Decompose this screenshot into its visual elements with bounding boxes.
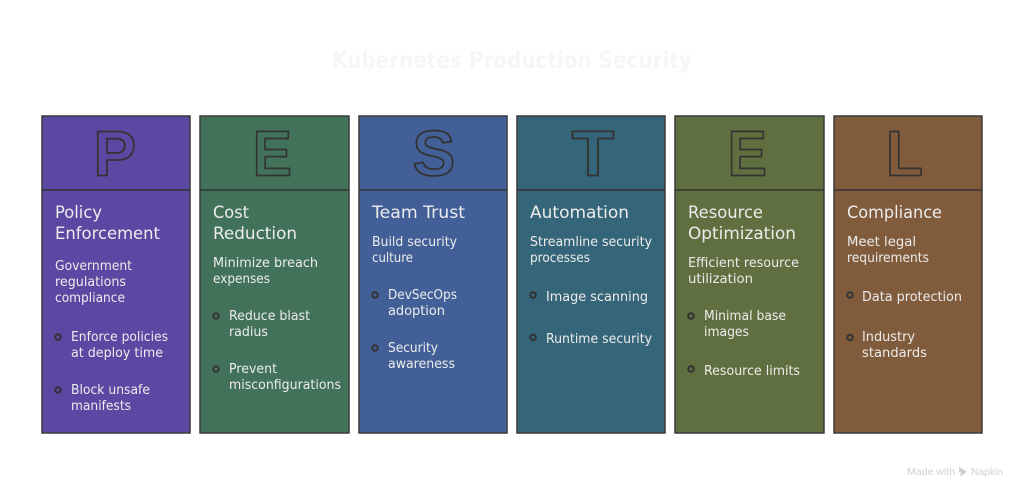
heading: Resource Optimization: Optimization xyxy=(688,224,796,244)
description: requirements xyxy=(847,251,929,266)
description: Efficient resource xyxy=(688,256,799,271)
bullet: Security awareness: awareness xyxy=(388,357,455,372)
panel: P Policy Enforcement xyxy=(42,116,190,433)
bullet: Minimal base images: Minimal base xyxy=(704,309,786,324)
letter L: L xyxy=(886,118,923,190)
heading: Policy Enforcement: Policy xyxy=(55,203,102,223)
watermark: Made with Napkin xyxy=(907,466,1003,478)
bullet: Prevent misconfigurations: Prevent xyxy=(229,362,277,377)
letter S: S xyxy=(412,118,455,190)
letter E: E xyxy=(728,118,767,190)
bullet: Data protection: Data protection xyxy=(862,290,962,305)
bullet: Security awareness: Security xyxy=(388,341,438,356)
description: processes xyxy=(530,251,590,266)
bullet: Reduce blast radius: Reduce blast xyxy=(229,309,310,324)
panel: L Compliance xyxy=(834,116,982,433)
description xyxy=(530,235,652,266)
watermark: Made with Napkin: Made with xyxy=(907,466,955,478)
panel: S Team Trust xyxy=(359,116,507,433)
panel: E Resource Optimization xyxy=(675,116,824,433)
heading: Policy Enforcement: Enforcement xyxy=(55,224,160,244)
bullet: Industry standards: standards xyxy=(862,346,927,361)
bullet: Minimal base images: images xyxy=(704,325,749,340)
bullet: Security awareness xyxy=(372,341,455,372)
heading: Cost Reduction: Cost xyxy=(213,203,249,223)
heading: Compliance: Compliance xyxy=(847,203,942,223)
bullet: Prevent misconfigurations: misconfigurations xyxy=(229,378,341,393)
description xyxy=(847,235,929,266)
letter T: T xyxy=(572,118,614,190)
panel: T Automation xyxy=(517,116,665,433)
heading: Automation: Automation xyxy=(530,203,629,223)
bullet: Block unsafe: Block unsafe xyxy=(71,383,150,398)
letter E: E xyxy=(253,118,292,190)
bullet: Industry standards: Industry xyxy=(862,330,915,345)
heading: Policy Enforcement xyxy=(55,203,160,244)
description xyxy=(688,256,799,287)
bullet: Block unsafe: manifests xyxy=(71,399,131,414)
description: utilization xyxy=(688,272,753,287)
bullet: Enforce policies: Enforce policies xyxy=(71,330,168,345)
description: Streamline security xyxy=(530,235,652,250)
bullet: Image scanning: Image scanning xyxy=(546,290,648,305)
heading: Resource Optimization: Resource xyxy=(688,203,763,223)
description: Build security xyxy=(372,235,457,250)
description xyxy=(372,235,457,266)
bullet: Runtime security: Runtime security xyxy=(546,332,652,347)
description: Government xyxy=(55,259,132,274)
bullet: Reduce blast radius xyxy=(213,309,310,340)
title: Kubernetes Production Security xyxy=(332,48,692,74)
description xyxy=(55,259,132,306)
watermark: Made with Napkin: Napkin xyxy=(971,466,1003,478)
bullet: Prevent misconfigurations xyxy=(213,362,341,393)
description: culture xyxy=(372,251,413,266)
letter P: P xyxy=(94,118,136,190)
description: Minimize breach xyxy=(213,256,318,271)
heading: Cost Reduction: Reduction xyxy=(213,224,297,244)
heading: Resource Optimization xyxy=(688,203,796,244)
bullet: DevSecOps adoption xyxy=(372,288,457,319)
bullet: Resource limits: Resource limits xyxy=(704,364,800,379)
description: compliance xyxy=(55,291,125,306)
bullet: DevSecOps adoption: adoption xyxy=(388,304,445,319)
bullet: Enforce policies xyxy=(55,330,168,361)
panel: E Cost Reduction xyxy=(200,116,349,433)
description: expenses xyxy=(213,272,270,287)
description xyxy=(213,256,318,287)
description: Meet legal xyxy=(847,235,916,250)
bullet: Enforce policies: at deploy time xyxy=(71,346,163,361)
bullet: Minimal base images xyxy=(688,309,786,340)
heading: Team Trust: Team Trust xyxy=(371,203,465,223)
bullet: Block unsafe xyxy=(55,383,150,414)
bullet: Reduce blast radius: radius xyxy=(229,325,268,340)
heading: Cost Reduction xyxy=(213,203,297,244)
description: regulations xyxy=(55,275,126,290)
bullet: Industry standards xyxy=(847,330,927,361)
bullet: DevSecOps adoption: DevSecOps xyxy=(388,288,457,303)
